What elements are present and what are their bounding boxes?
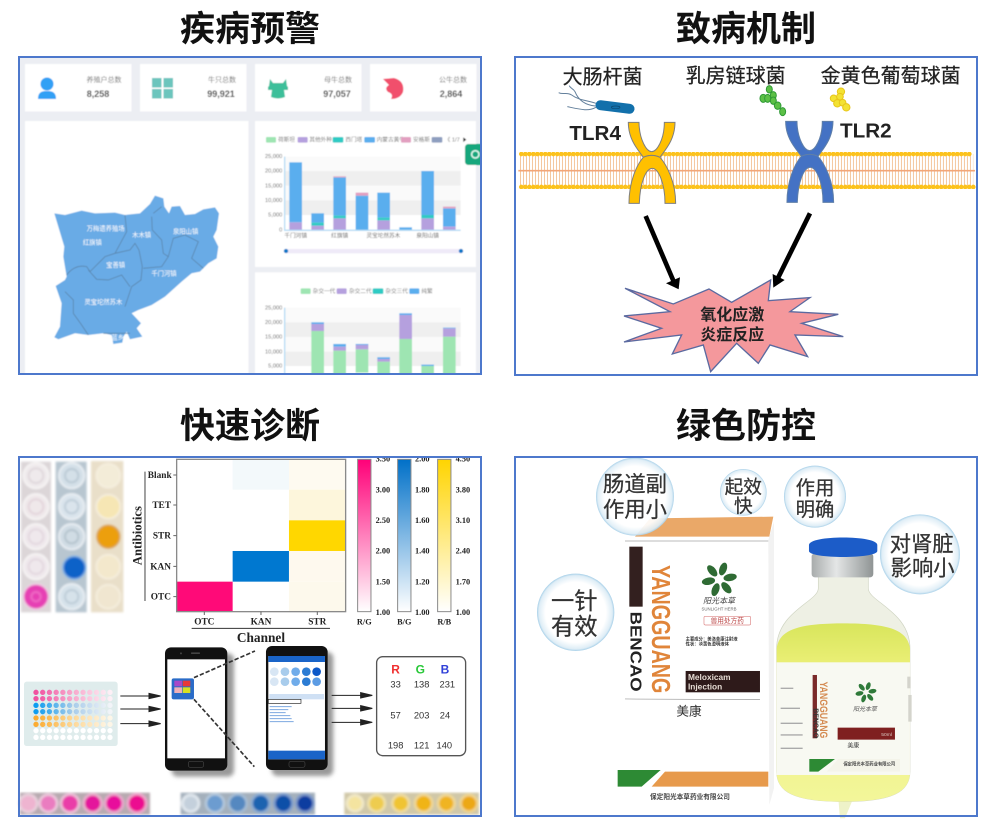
prescription stamp: 兽用处方药 bbox=[711, 616, 744, 625]
bacteria labels bbox=[563, 65, 961, 88]
map of districts bbox=[54, 196, 219, 344]
benefit bubble: 作用明确: 明确 bbox=[796, 499, 834, 521]
product name plate: Injection bbox=[688, 682, 722, 692]
chart panel: generation stacked bars bbox=[255, 272, 476, 379]
arrow: TLR2 to stress bbox=[773, 213, 810, 288]
chart panel: breed stacked bars: 15,000 bbox=[265, 183, 282, 189]
benefit bubble: 肠道副作用小: 作用小 bbox=[603, 498, 667, 522]
bottle: 50ml bbox=[881, 732, 892, 738]
arrows: phone to values bbox=[332, 693, 372, 725]
icon: staphylococcus cluster bbox=[830, 88, 850, 111]
legend: 杂交三代 bbox=[385, 287, 408, 295]
benefit bubble: 一针有效: 一针 bbox=[551, 588, 598, 614]
RGB values table: 231 bbox=[440, 680, 455, 690]
well strip: pink gradient bbox=[18, 793, 150, 815]
RGB values table: 138 bbox=[414, 680, 429, 690]
RGB values table: 57 bbox=[390, 710, 401, 720]
colorbar R/B: 4.50 bbox=[456, 455, 470, 464]
chart panel: breed stacked bars bbox=[255, 121, 476, 267]
settings tab bbox=[464, 143, 480, 166]
map of districts: 灵宝坨然苏木 bbox=[84, 297, 123, 306]
colorbar R/G: 2.50 bbox=[376, 516, 390, 525]
receptor TLR4 bbox=[628, 122, 676, 203]
dashed zoom lines bbox=[194, 651, 255, 767]
panel: green prevention bbox=[515, 458, 978, 818]
legend: 杂交一代 bbox=[313, 287, 336, 295]
box small print: 主要成分：美洛昔康注射液 bbox=[686, 636, 738, 643]
label: TLR4: TLR4 bbox=[569, 122, 621, 145]
benefit bubble: 肠道副作用小: 肠道副 bbox=[603, 473, 667, 497]
box brand: YANGGUANG: YANGGUANG bbox=[646, 565, 676, 693]
title: 快速诊断: 快速诊断 bbox=[180, 407, 320, 446]
box footer stripes bbox=[618, 770, 768, 787]
bottle neck and cap bbox=[812, 553, 873, 577]
heatmap: KAN bbox=[251, 617, 272, 627]
chart panel: generation stacked bars: 25,000 bbox=[265, 305, 282, 311]
heatmap: STR bbox=[153, 532, 171, 542]
colorbar B/G: 1.60 bbox=[415, 516, 430, 525]
map of districts: 万梅遗养殖场 bbox=[87, 223, 125, 232]
map of districts: 红旗镇 bbox=[83, 238, 102, 247]
benefit bubble: 起效快: 起效 bbox=[725, 476, 762, 497]
bacteria labels: 大肠杆菌 bbox=[563, 65, 643, 88]
panel: rapid diagnosis bbox=[19, 455, 481, 819]
chart panel: breed stacked bars: 0 bbox=[279, 227, 282, 233]
colorbar R/G: R/G bbox=[357, 617, 372, 626]
legend: 安格斯 bbox=[413, 136, 430, 144]
benefit bubble: 作用明确: 作用 bbox=[796, 477, 834, 499]
map of districts: 宝善镇 bbox=[106, 260, 126, 269]
stat card: farmers: 8,258 bbox=[87, 89, 109, 99]
RGB values table: R bbox=[391, 662, 400, 676]
chart panel: breed stacked bars: 10,000 bbox=[265, 198, 282, 204]
colorbar B/G bbox=[397, 455, 430, 626]
heatmap bbox=[148, 459, 346, 627]
RGB values table: 33 bbox=[390, 680, 401, 690]
product name plate: Meloxicam bbox=[688, 672, 731, 682]
RGB values table: 24 bbox=[440, 710, 450, 720]
colorbar R/B: 1.70 bbox=[456, 577, 470, 586]
heatmap: KAN bbox=[150, 562, 171, 572]
legend bbox=[301, 287, 433, 295]
colorbar R/B: 2.40 bbox=[456, 547, 470, 556]
map of districts: 木木镇 bbox=[132, 230, 152, 239]
benefit bubble: 作用明确 bbox=[784, 466, 846, 528]
chart panel: generation stacked bars: 15,000 bbox=[265, 335, 282, 341]
colorbar B/G: 2.00 bbox=[415, 455, 430, 464]
heatmap: OTC bbox=[194, 617, 215, 627]
bottle: 保定阳光本草药业有限公司 bbox=[843, 761, 895, 768]
colorbar B/G: B/G bbox=[397, 617, 412, 626]
colorbar R/B bbox=[437, 455, 470, 626]
colorbar R/G bbox=[357, 455, 390, 626]
phone with test app screen bbox=[266, 646, 333, 776]
bottle: 美康 bbox=[847, 742, 859, 750]
legend: 西门塔 bbox=[345, 136, 363, 144]
benefit bubble: 对肾脏影响小: 影响小 bbox=[891, 557, 955, 581]
colorbar B/G: 1.40 bbox=[415, 547, 430, 556]
panel: disease warning dashboard bbox=[20, 58, 485, 379]
stat card: cattle: 99,921 bbox=[207, 89, 235, 99]
colorbar R/B: R/B bbox=[437, 617, 452, 626]
label: TLR2: TLR2 bbox=[840, 119, 892, 142]
benefit bubble: 对肾脏影响小: 对肾脏 bbox=[890, 533, 954, 557]
colorbar R/G: 2.00 bbox=[376, 547, 390, 556]
legend: 荷斯坦 bbox=[278, 136, 295, 144]
chart panel: breed stacked bars: 灵宝坨然苏木 bbox=[366, 232, 401, 240]
starburst: oxidative stress and inflammation: 氧化应激 bbox=[700, 305, 764, 324]
axis title: Channel: Channel bbox=[237, 630, 285, 645]
stat card: bulls: 公牛总数 bbox=[439, 75, 467, 84]
legend: 《 1/7 bbox=[445, 137, 460, 144]
title: 致病机制: 致病机制 bbox=[676, 10, 816, 49]
heatmap: TET bbox=[152, 501, 172, 511]
stat card: farmers bbox=[25, 64, 132, 112]
box small print bbox=[686, 636, 738, 648]
axis title: Antibiotics: Antibiotics bbox=[131, 506, 145, 565]
bottle bbox=[777, 537, 910, 818]
benefit bubble: 对肾脏影响小 bbox=[880, 514, 960, 594]
bacteria labels: 乳房链球菌 bbox=[686, 65, 786, 88]
stat card: cows: 97,057 bbox=[323, 89, 351, 99]
chart panel: breed stacked bars: 泉阳山镇 bbox=[416, 232, 439, 240]
box small print: 性状：淡黄色澄明液体 bbox=[686, 641, 730, 648]
well strip: yellow bbox=[91, 461, 123, 612]
bottle: YANGGUANG bbox=[817, 682, 829, 738]
stat card: cattle: 牛只总数 bbox=[208, 75, 236, 84]
phone with app icon bbox=[165, 647, 234, 777]
bottle: 阳光本草 bbox=[853, 705, 878, 713]
receptor TLR2 bbox=[786, 121, 834, 202]
colorbar R/G: 1.00 bbox=[376, 608, 390, 617]
medicine box bbox=[618, 517, 774, 805]
panel border: diagnosis bbox=[19, 457, 481, 816]
manufacturer: 保定阳光本草药业有限公司 bbox=[650, 792, 730, 801]
heatmap: STR bbox=[308, 617, 327, 627]
RGB values table: 140 bbox=[437, 741, 452, 751]
stat card: cattle bbox=[140, 64, 246, 112]
colorbar R/G: 1.50 bbox=[376, 577, 390, 586]
legend bbox=[266, 136, 466, 144]
colorbar R/B: 3.10 bbox=[456, 516, 470, 525]
product name: 美康: 美康 bbox=[676, 704, 702, 719]
colorbar R/G: 3.50 bbox=[376, 455, 390, 464]
bottle label bbox=[777, 662, 910, 775]
map of districts: 泉阳山镇 bbox=[173, 227, 199, 236]
colorbar R/B: 3.80 bbox=[456, 485, 470, 494]
chart panel: breed stacked bars: 25,000 bbox=[265, 154, 282, 160]
chart panel: breed stacked bars: 5,000 bbox=[268, 213, 282, 219]
title: 疾病预警: 疾病预警 bbox=[180, 10, 320, 49]
legend: 其他外种 bbox=[309, 136, 332, 144]
chart panel: breed stacked bars: 千门河镇 bbox=[284, 232, 307, 240]
panel border: mechanism bbox=[515, 57, 977, 375]
chart panel: generation stacked bars: 20,000 bbox=[265, 320, 282, 326]
arrows: plate to phone bbox=[120, 693, 161, 726]
box brand bar bbox=[629, 547, 643, 607]
colorbar R/B: 1.00 bbox=[456, 608, 470, 617]
benefit bubble: 一针有效 bbox=[537, 574, 614, 651]
heatmap: OTC bbox=[151, 593, 171, 603]
benefit bubble: 肠道副作用小 bbox=[596, 458, 674, 536]
RGB values table: 203 bbox=[414, 710, 429, 720]
well strip: yellow gradient bbox=[344, 793, 479, 815]
prescription stamp bbox=[704, 616, 751, 625]
chart panel: generation stacked bars: 10,000 bbox=[265, 349, 282, 355]
well strip: pink bbox=[21, 462, 51, 612]
well strip: blue bbox=[56, 462, 87, 612]
icon: streptococcus chain bbox=[760, 86, 786, 116]
logo: green pinwheel bbox=[701, 561, 737, 597]
colorbar R/G: 3.00 bbox=[376, 485, 390, 494]
legend: 杂交二代 bbox=[349, 287, 372, 295]
colorbar B/G: 1.20 bbox=[415, 577, 430, 586]
chart panel: generation stacked bars: 5,000 bbox=[268, 364, 282, 370]
legend: 纯繁 bbox=[421, 287, 433, 295]
stat card: farmers: 养殖户总数 bbox=[86, 75, 122, 84]
legend: 内蒙古黄牛 bbox=[377, 136, 405, 144]
panel: pathogenic mechanism bbox=[515, 57, 978, 375]
map panel bbox=[25, 121, 248, 376]
RGB values table: 198 bbox=[388, 741, 403, 751]
heatmap: Blank bbox=[148, 471, 172, 481]
colorbar B/G: 1.80 bbox=[415, 485, 430, 494]
arrow: TLR4 to stress bbox=[646, 216, 680, 289]
RGB values table bbox=[377, 657, 466, 756]
map of districts: 蓝乡 bbox=[111, 332, 124, 341]
stat card: cows: 母牛总数 bbox=[324, 75, 352, 84]
title: 绿色防控: 绿色防控 bbox=[676, 407, 816, 446]
benefit bubble: 起效快: 快 bbox=[734, 495, 753, 516]
map of districts: 千门河镇 bbox=[151, 269, 177, 278]
benefit bubble: 起效快 bbox=[720, 469, 767, 516]
product name plate bbox=[686, 671, 760, 692]
stat card: bulls: 2,864 bbox=[440, 89, 462, 99]
well strip: blue gradient bbox=[181, 793, 315, 815]
icon: E. coli bacterium bbox=[559, 86, 635, 114]
cell membrane bbox=[518, 154, 975, 187]
stat card: bulls bbox=[370, 64, 476, 112]
colorbar B/G: 1.00 bbox=[415, 608, 430, 617]
RGB values table: B bbox=[441, 662, 450, 676]
96-well plate bbox=[24, 682, 118, 746]
chart panel: breed stacked bars: 红旗镇 bbox=[331, 232, 348, 240]
logo text: 阳光本草 bbox=[703, 596, 737, 605]
RGB values table: 121 bbox=[414, 741, 429, 751]
stat card: cows bbox=[255, 64, 362, 112]
box brand: BENCAO: BENCAO bbox=[627, 612, 644, 692]
RGB values table: G bbox=[416, 662, 425, 676]
benefit bubble: 一针有效: 有效 bbox=[551, 613, 598, 639]
bacteria labels: 金黄色葡萄球菌 bbox=[821, 65, 961, 88]
panel border: prevention bbox=[515, 457, 977, 816]
medicine box: SUNLIGHT HERB bbox=[701, 607, 737, 612]
chart panel: breed stacked bars: 20,000 bbox=[265, 169, 282, 175]
starburst: oxidative stress and inflammation: 炎症反应 bbox=[700, 325, 764, 344]
bottle: BENCAO bbox=[811, 708, 820, 739]
starburst: oxidative stress and inflammation bbox=[624, 280, 843, 372]
panel border: dashboard bbox=[19, 57, 481, 374]
